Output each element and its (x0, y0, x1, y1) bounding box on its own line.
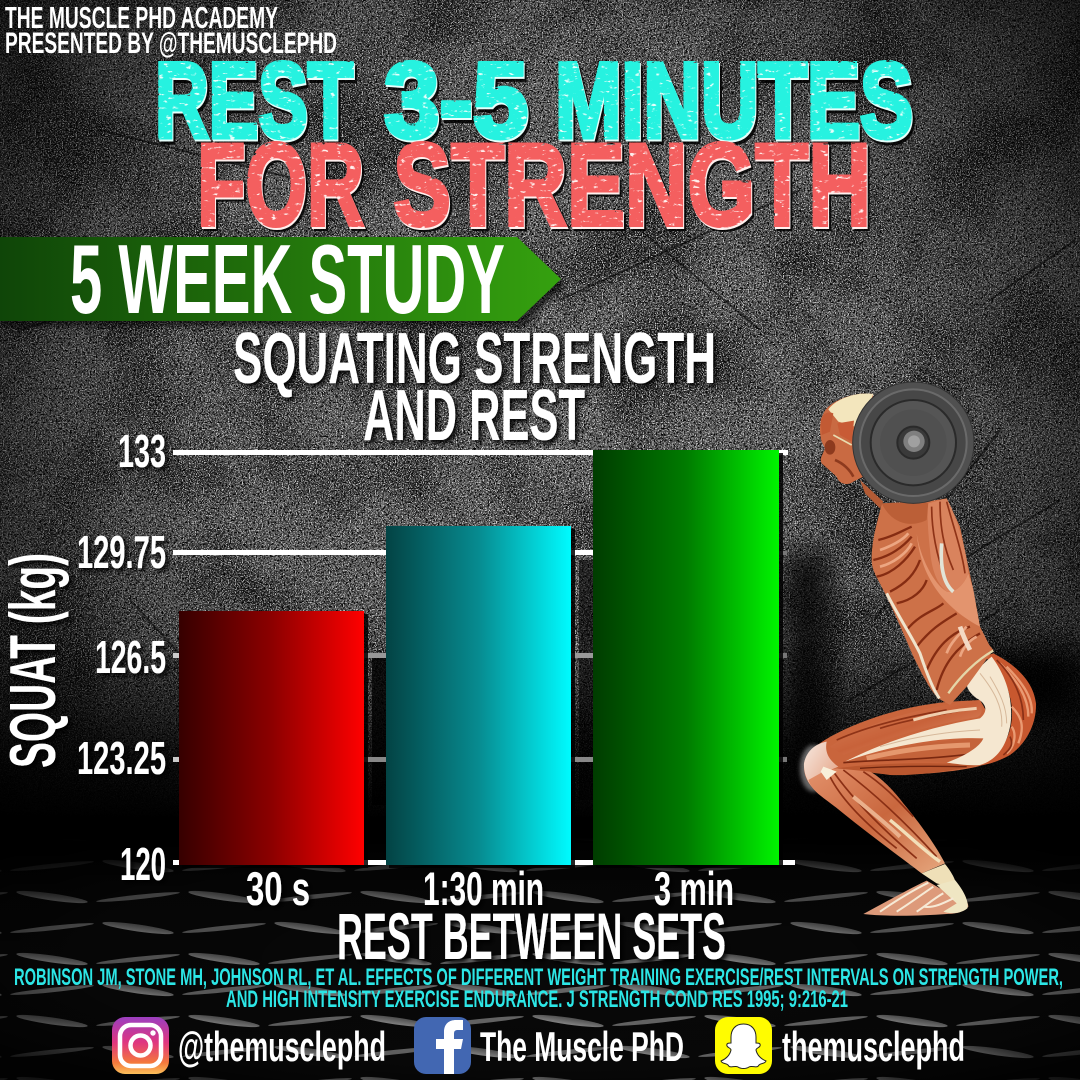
bar shadows (182, 453, 783, 868)
title line 1: MINUTES (555, 40, 913, 160)
knee (804, 742, 838, 795)
icon: facebook (414, 1017, 471, 1074)
title line 1 (155, 40, 916, 165)
knee glow (800, 745, 827, 792)
title line 1: 3-5 (384, 40, 528, 160)
title line 2: FOR (200, 123, 367, 254)
shin (808, 767, 945, 873)
thigh (804, 657, 1011, 797)
title line 1: REST (156, 42, 354, 162)
title line 2 (197, 119, 874, 254)
y axis values: 133 (118, 425, 166, 477)
title (155, 40, 916, 254)
title line 1: 3-5 (387, 45, 531, 165)
neck (860, 480, 883, 508)
chart heading: AND REST (363, 376, 585, 456)
handle: snapchat: themusclephd (782, 1023, 965, 1070)
title line 2: STRENGTH (393, 119, 871, 250)
icon: snapchat (715, 1017, 772, 1074)
y axis values (77, 425, 166, 890)
header: academy credit (5, 0, 337, 60)
y axis values: 120 (120, 838, 166, 890)
title line 1: MINUTES (556, 42, 914, 162)
title line 1: MINUTES (558, 45, 916, 165)
glute (982, 653, 1036, 765)
torso (872, 498, 993, 705)
title line 1: 3-5 (385, 42, 529, 162)
title line 1: REST (158, 45, 356, 165)
bar chart (173, 450, 795, 868)
ankle (922, 864, 957, 888)
bar: 30 s (179, 611, 364, 865)
title line 2: FOR (197, 119, 364, 250)
title line 2: FOR (198, 121, 365, 252)
title line 1: REST (155, 40, 353, 160)
upper body (820, 382, 993, 705)
bar: 1:30 min (386, 526, 571, 865)
banner: 5 week study (0, 224, 565, 334)
grid lines (173, 450, 795, 865)
x axis title: REST BETWEEN SETS (337, 899, 726, 973)
y axis values: 123.25 (77, 732, 166, 784)
title line 2: STRENGTH (396, 123, 874, 254)
social links (112, 1017, 965, 1074)
header: academy credit: PRESENTED BY @THEMUSCLEPHD (5, 27, 337, 60)
x axis labels (246, 862, 734, 915)
bar: 3 min (593, 450, 779, 865)
figure: squatting muscular anatomy with barbell (800, 382, 1036, 916)
x axis labels: 30 s (246, 862, 310, 915)
title line 2: STRENGTH (394, 121, 872, 252)
citation (14, 964, 1063, 1013)
barbell plate (853, 382, 974, 503)
icon: instagram (112, 1017, 169, 1074)
x axis labels: 1:30 min (423, 862, 544, 915)
handle: facebook: The Muscle PhD (480, 1023, 684, 1070)
chart heading (233, 319, 716, 456)
y axis values: 129.75 (77, 526, 166, 578)
y axis values: 126.5 (95, 631, 166, 683)
header: academy credit: THE MUSCLE PHD ACADEMY (5, 0, 278, 35)
banner: 5 week study: 5 WEEK STUDY (70, 224, 505, 334)
chart heading: SQUATING STRENGTH (233, 319, 716, 399)
foot (863, 880, 968, 916)
x axis labels: 3 min (654, 862, 734, 915)
head (820, 394, 873, 484)
lower body (800, 653, 1036, 916)
handle: instagram: @themusclephd (178, 1023, 386, 1070)
